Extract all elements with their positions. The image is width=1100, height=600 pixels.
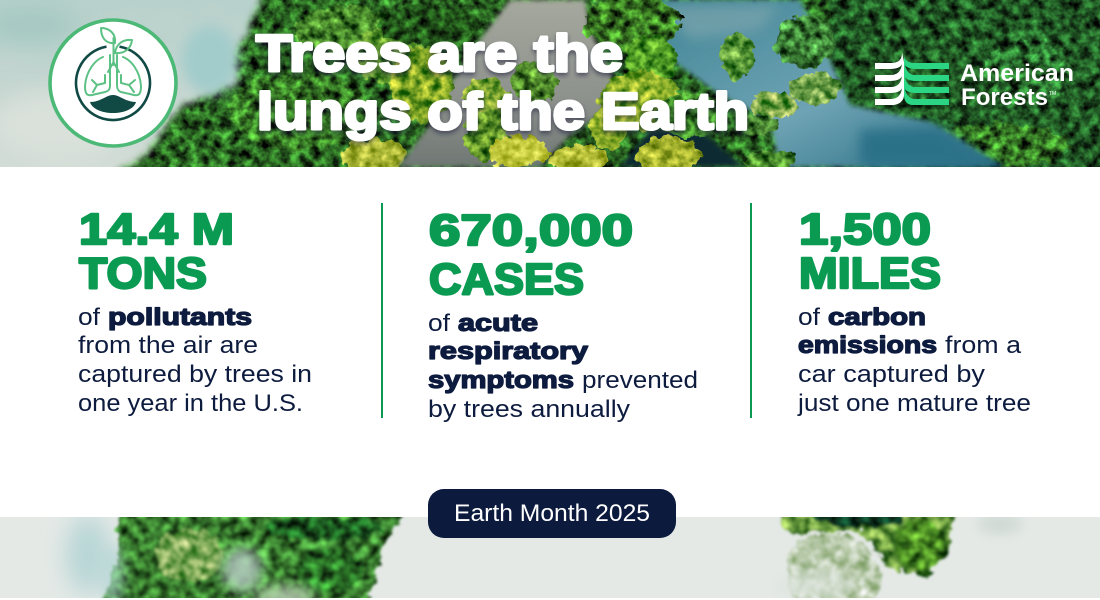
stat figure: MILES xyxy=(799,249,941,298)
stat description: carbon xyxy=(828,304,926,331)
logo wordmark: American xyxy=(960,60,1074,87)
American Forests logo: Forests xyxy=(961,84,1048,111)
logo badge: lungs and seedling icon xyxy=(50,20,176,146)
right forest patch xyxy=(778,517,957,598)
stat description: of xyxy=(428,310,450,337)
left forest patch xyxy=(100,517,404,598)
dark ring xyxy=(76,47,150,120)
stat description: emissions xyxy=(798,332,937,359)
stat description xyxy=(428,310,698,423)
clouds xyxy=(0,0,265,167)
stat figure: CASES xyxy=(429,255,584,304)
stat figure xyxy=(79,205,234,298)
stat description xyxy=(78,304,312,417)
stat description: prevented xyxy=(582,367,698,394)
soil mound xyxy=(90,95,136,113)
stat: 14.4 M tons xyxy=(78,205,312,417)
American Forests logo xyxy=(875,52,1074,111)
title: lungs of the Earth xyxy=(257,83,749,141)
badge: Earth Month 2025: Earth Month 2025 xyxy=(454,500,650,527)
stat figure: 1,500 xyxy=(799,205,931,254)
stat description: symptoms xyxy=(428,367,574,394)
badge: Earth Month 2025 xyxy=(428,489,676,538)
stat figure xyxy=(429,206,633,304)
tree clumps over water xyxy=(392,0,841,173)
American Forests logo: TM xyxy=(1049,91,1056,97)
lungs and seedling xyxy=(85,28,141,95)
blue river xyxy=(650,0,1005,167)
stat description: from a xyxy=(945,332,1022,359)
forest canopy xyxy=(115,0,1100,167)
stat figure xyxy=(799,205,941,298)
grey lake xyxy=(398,0,612,167)
stat description: of xyxy=(78,304,100,331)
stat description: from the air are xyxy=(78,332,258,359)
stat description: by trees annually xyxy=(428,396,630,423)
stat description: of xyxy=(798,304,820,331)
stat description: one year in the U.S. xyxy=(78,390,303,417)
title xyxy=(256,25,749,141)
stat description xyxy=(797,304,1031,417)
header photo: aerial forest with river and clouds xyxy=(0,0,1100,167)
stat description: car captured by xyxy=(798,361,985,388)
stat figure: 14.4 M xyxy=(79,205,234,254)
stat figure: TONS xyxy=(79,249,207,298)
stat: 1,500 miles xyxy=(797,205,1031,417)
logo mark: tree stripes xyxy=(875,52,949,105)
stat: 670,000 cases xyxy=(428,206,698,423)
stat description: respiratory xyxy=(428,338,589,365)
stat description: captured by trees in xyxy=(78,361,312,388)
stat description: pollutants xyxy=(108,304,252,331)
title: Trees are the xyxy=(256,25,623,83)
footer photo: forest through clouds xyxy=(0,517,1100,598)
stat figure: 670,000 xyxy=(429,206,633,255)
stat description: acute xyxy=(458,310,538,337)
stat description: just one mature tree xyxy=(797,390,1031,417)
